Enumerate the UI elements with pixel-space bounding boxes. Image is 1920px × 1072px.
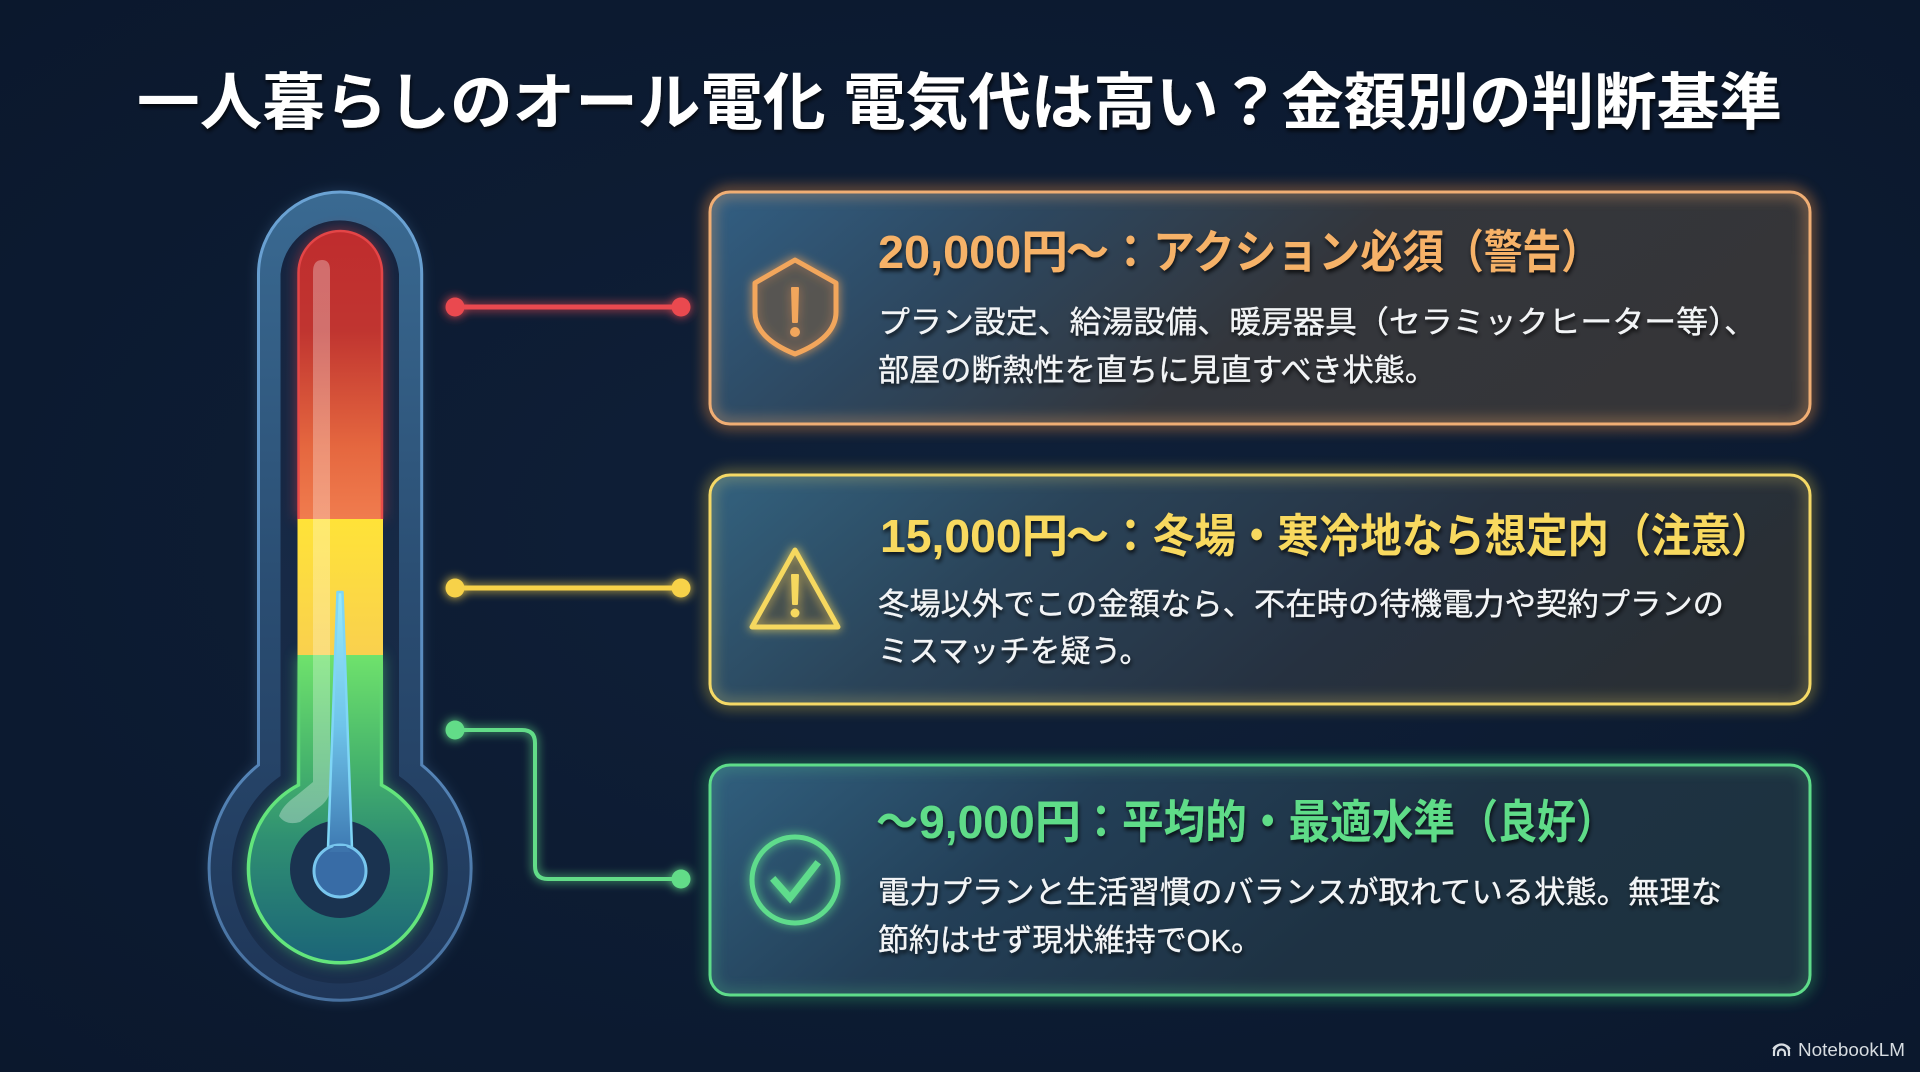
watermark: NotebookLM: NotebookLM: [1798, 1040, 1905, 1060]
heading: ：: [1080, 796, 1122, 848]
heading: 15,000円: [880, 510, 1068, 562]
heading: （良好）: [1459, 796, 1615, 848]
panel: 20,000円 warning: [710, 192, 1810, 424]
body text: [878, 305, 1756, 388]
glass highlight: [279, 260, 330, 823]
connector: warning: [446, 298, 690, 316]
heading: 9,000円: [919, 796, 1081, 848]
body text: 冬場以外でこの金額なら、不在時の待機電力や契約プランの: [878, 587, 1724, 622]
thermometer liquid glow: [298, 230, 383, 519]
connector: caution: [446, 578, 690, 598]
heading: （警告）: [1445, 226, 1600, 278]
heading: ～: [876, 796, 918, 848]
icon: NotebookLM logo: [1773, 1044, 1790, 1056]
heading: （注意）: [1611, 510, 1771, 562]
heading: [878, 226, 1600, 278]
body text: プラン設定、給湯設備、暖房器具（セラミックヒーター等）、: [878, 305, 1756, 340]
heading: [876, 796, 1615, 848]
thermometer: [209, 192, 471, 1000]
liquid: green outline: [249, 655, 432, 963]
body text: [878, 587, 1724, 669]
liquid: red outline: [298, 231, 382, 519]
thermometer inner chamber: [232, 220, 448, 983]
body text: 部屋の断熱性を直ちに見直すべき状態。: [878, 353, 1436, 388]
needle hub: [314, 845, 366, 897]
panel: 15,000円 caution: [710, 475, 1810, 704]
icon: check circle: [752, 837, 838, 923]
panel: 9,000円 good: [710, 765, 1810, 995]
heading: アクション必須: [1153, 226, 1444, 278]
connector: good: [446, 720, 690, 888]
heading: 冬場・寒冷地なら想定内: [1153, 510, 1609, 562]
heading: 20,000円: [878, 226, 1068, 278]
icon: shield: [755, 260, 836, 354]
thermometer outer shell: [209, 192, 471, 1000]
body text: ミスマッチを疑う。: [878, 634, 1150, 669]
liquid: colour bands: [250, 230, 430, 961]
hub shadow: [290, 820, 390, 918]
heading: 平均的・最適水準: [1122, 796, 1455, 848]
needle: [328, 592, 352, 848]
heading: ～：: [1066, 226, 1152, 278]
icon: warning triangle: [752, 550, 838, 627]
heading: [880, 510, 1771, 562]
body text: [878, 875, 1722, 958]
body text: 電力プランと生活習慣のバランスが取れている状態。無理な: [878, 875, 1722, 910]
body text: 節約はせず現状維持でOK。: [878, 923, 1262, 958]
heading: ～：: [1066, 510, 1152, 562]
title: 一人暮らしのオール電化 電気代は高い？金額別の判断基準: [137, 69, 1782, 138]
